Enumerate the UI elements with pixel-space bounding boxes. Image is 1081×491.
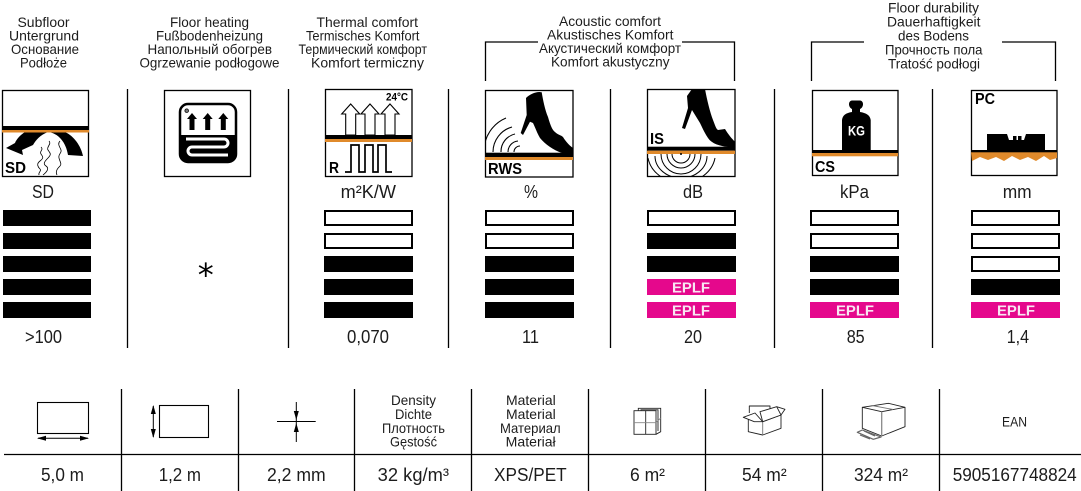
- unit: mm: mm: [1003, 182, 1032, 202]
- icon: open box: [743, 406, 785, 435]
- icon: roll length: [37, 402, 89, 441]
- heading: acoustic comfort: Komfort akustyczny: [551, 54, 670, 70]
- heading: floor durability: Прочность пола: [885, 41, 983, 57]
- heading: subfloor: Основание: [11, 41, 79, 57]
- heading: floor heating: Напольный обогрев: [148, 41, 272, 57]
- heading: subfloor: [9, 14, 79, 71]
- heading: material: [500, 392, 561, 450]
- icon: roll width: [151, 405, 208, 438]
- icon: thickness: [277, 402, 316, 442]
- icon: compressive strength CS: [812, 90, 898, 176]
- rating bars: IS: EPLF: [672, 302, 710, 319]
- heading: subfloor: Untergrund: [9, 28, 79, 44]
- rating bars: IS: EPLF: [672, 279, 710, 296]
- icon: acoustic IS: IS: [650, 131, 664, 148]
- icon: acoustic RWS: RWS: [488, 161, 522, 178]
- icon: acoustic RWS: [484, 90, 573, 178]
- unit: m2K/W: m²K/W: [341, 182, 396, 202]
- bracket: floor durability: [812, 42, 1056, 81]
- heading: thermal comfort: Termisches Komfort: [306, 28, 420, 44]
- rating bars: PC: EPLF: [997, 302, 1035, 319]
- icon: acoustic IS: [647, 89, 735, 183]
- unit: kPa: kPa: [840, 182, 870, 202]
- rating bars: thermal: [324, 211, 413, 318]
- value: subfloor: >100: [25, 327, 62, 347]
- value: thermal: 0,070: [347, 327, 389, 347]
- icon: compressive strength CS: KG: [848, 123, 865, 139]
- heading: density: [382, 392, 445, 450]
- heading: floor heating: [140, 14, 280, 71]
- bottom value: length: 5,0 m: [41, 465, 84, 485]
- heading: subfloor: Podłoże: [20, 55, 67, 71]
- heading: floor heating: Floor heating: [170, 14, 249, 30]
- heading: EAN: EAN: [1002, 414, 1027, 430]
- rating bars: subfloor: [3, 210, 91, 318]
- heading: floor heating: Fußbodenheizung: [156, 28, 263, 44]
- bottom value: pallet area: 324 m²: [854, 465, 908, 485]
- rating bars: PC: [971, 211, 1060, 319]
- bottom value: width: 1,2 m: [159, 465, 201, 485]
- heading: density: Gęstość: [390, 434, 437, 450]
- heading: material: Materiał: [506, 434, 557, 450]
- heading: acoustic comfort: Акустический комфорт: [539, 40, 682, 56]
- heading: floor durability: des Bodens: [898, 28, 969, 44]
- heading: floor durability: Floor durability: [888, 0, 979, 16]
- heading: floor durability: Tratość podłogi: [888, 55, 980, 71]
- heading: density: Dichte: [395, 406, 432, 422]
- icon: pack: [634, 408, 661, 434]
- unit: dB: dB: [683, 182, 703, 202]
- icon: subfloor SD: SD: [5, 160, 26, 177]
- icon: thermal R: 24°C: [386, 92, 408, 104]
- bracket: acoustic comfort: [486, 42, 734, 81]
- icon: subfloor SD: [2, 90, 89, 177]
- heading: density: Density: [391, 392, 436, 408]
- heading: floor heating: Ogrzewanie podłogowe: [140, 55, 280, 71]
- heading: density: Плотность: [382, 420, 445, 436]
- heading: material: Material: [506, 406, 556, 422]
- icon: thermal R: R: [329, 160, 339, 177]
- icon: point compression PC: [971, 90, 1057, 176]
- bottom value: EAN: 5905167748824: [953, 465, 1077, 485]
- bottom value: box area: 54 m²: [742, 465, 787, 485]
- heading: acoustic comfort: Acoustic comfort: [559, 13, 661, 29]
- value: PC: 1,4: [1007, 327, 1029, 347]
- bottom value: material: XPS/PET: [494, 465, 567, 485]
- heading: acoustic comfort: [539, 13, 682, 70]
- icon: floor heating: [164, 90, 250, 176]
- icon: pallet box: [857, 403, 905, 439]
- bottom value: thickness: 2,2 mm: [267, 465, 326, 485]
- heading: thermal comfort: Thermal comfort: [316, 14, 418, 30]
- value: RWS: 11: [522, 327, 539, 347]
- heading: material: Материал: [500, 420, 561, 436]
- heading: floor durability: [885, 0, 983, 71]
- heading: material: Material: [506, 392, 556, 408]
- rating bars: CS: EPLF: [836, 302, 874, 319]
- bottom value: density: 32 kg/m³: [378, 465, 449, 485]
- heading: thermal comfort: [298, 14, 428, 71]
- icon: thermal R: [325, 90, 412, 177]
- rating bars: CS: [810, 211, 899, 319]
- asterisk: floor heating: *: [198, 256, 214, 294]
- heading: thermal comfort: Komfort termiczny: [311, 55, 424, 71]
- unit: percent: %: [524, 182, 538, 202]
- unit: SD: SD: [32, 182, 54, 202]
- heading: acoustic comfort: Akustisches Komfort: [547, 26, 674, 42]
- heading: thermal comfort: Термический комфорт: [298, 41, 428, 57]
- heading: floor durability: Dauerhaftigkeit: [887, 14, 981, 30]
- icon: point compression PC: PC: [975, 91, 995, 108]
- value: CS: 85: [847, 327, 865, 347]
- icon: compressive strength CS: CS: [815, 159, 835, 176]
- value: IS: 20: [684, 327, 702, 347]
- bottom value: pack area: 6 m²: [630, 465, 665, 485]
- heading: subfloor: Subfloor: [18, 14, 70, 30]
- rating bars: IS: [647, 211, 736, 319]
- rating bars: RWS: [485, 211, 574, 318]
